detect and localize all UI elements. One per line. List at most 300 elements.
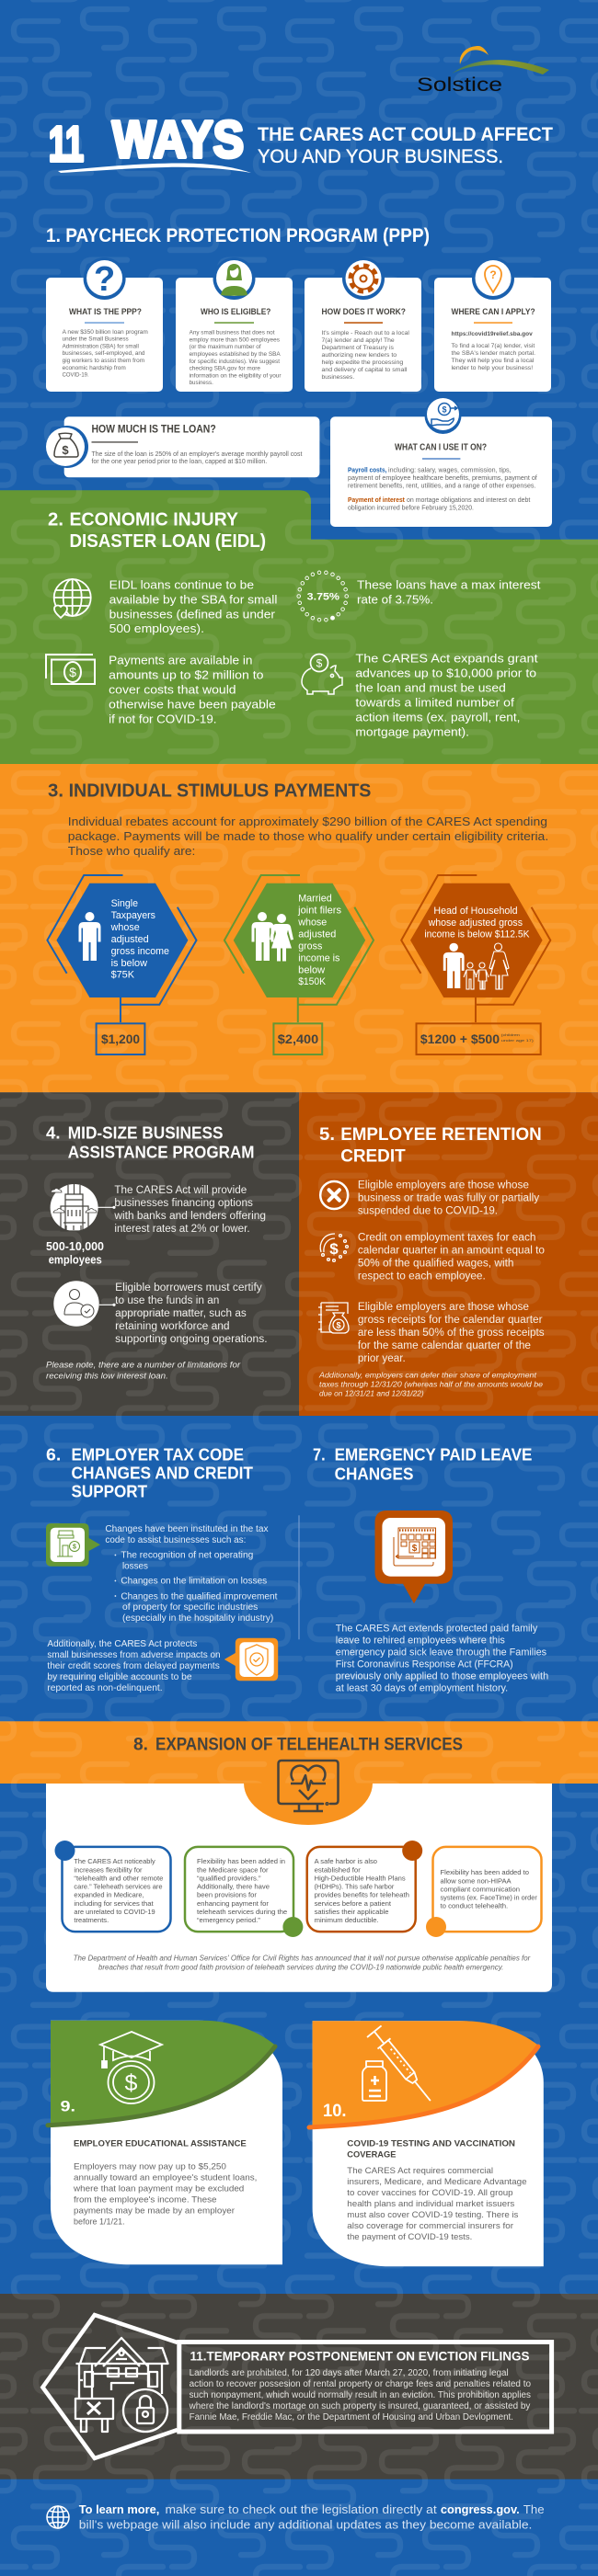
heading: section 2: 2. xyxy=(48,509,63,530)
callout: safe harbor: (HDHPs). This safe harbor xyxy=(315,1883,395,1891)
text: gross receipts: Eligible employers are those whose xyxy=(358,1302,529,1313)
amount box: (children xyxy=(501,1032,520,1037)
heading: section 5: CREDIT xyxy=(340,1146,406,1166)
text: also coverage for commercial insurers for xyxy=(347,2221,513,2231)
text: whose adjusted gross xyxy=(428,918,523,929)
text: grant advances: the loan and must be used xyxy=(355,680,506,694)
text: whose xyxy=(297,917,327,928)
text: grant advances: mortgage payment). xyxy=(355,724,469,738)
text: credit score protection: reported as non-delinquent. xyxy=(47,1683,163,1693)
text: annually toward an employee's student loans, xyxy=(74,2172,257,2183)
title: 11 ways brush lettering xyxy=(49,110,244,172)
text: credit score protection: their credit scores from delayed payments xyxy=(47,1661,220,1671)
text: credit xyxy=(358,1232,545,1282)
callout: Medicare flexibility: Flexibility has been added in xyxy=(197,1857,285,1865)
text: Married xyxy=(298,894,332,905)
text: borrowers certify: retaining workforce and xyxy=(115,1321,230,1332)
note: limitations: Please note, there are a number of limitations for xyxy=(46,1361,241,1371)
card heading: WHO IS ELIGIBLE? xyxy=(201,307,270,316)
callout: safe harbor xyxy=(307,1841,422,1932)
text: insurers, Medicare, and Medicare Advantage xyxy=(347,2177,527,2187)
text: credit score protection xyxy=(47,1639,221,1693)
text xyxy=(348,466,537,511)
title: 11 ways brush lettering: WAYS xyxy=(112,110,244,169)
text: health plans and individual market issuers xyxy=(347,2199,515,2209)
panel: who is eligible xyxy=(176,257,293,392)
text: credit score protection: by requiring eligible accounts to be xyxy=(47,1672,192,1682)
text: Payroll costs, xyxy=(348,466,386,474)
callout: safe harbor: A safe harbor is also xyxy=(315,1857,377,1865)
text: payments xyxy=(109,654,276,726)
heading: section 2 xyxy=(48,509,266,552)
icon: globe with heart xyxy=(54,579,91,618)
icon: dollar bills: $ xyxy=(69,665,76,679)
title xyxy=(49,110,553,173)
text: payments: cover costs that would xyxy=(109,683,236,697)
note: limitations: receiving this low interest loan. xyxy=(46,1372,168,1382)
amount box: $1,200 xyxy=(101,1032,140,1046)
icon: storefront callout: $ xyxy=(73,1544,76,1550)
icon: dollar bills xyxy=(46,655,95,684)
icon: ledger and bag: $ xyxy=(336,1320,341,1329)
callout: CARES flexibility: including for services that xyxy=(74,1899,154,1908)
text: Landlords are prohibited, for 120 days after March 27, 2020, from initiating legal xyxy=(190,2368,509,2378)
heading: section 4: 4. xyxy=(46,1123,61,1142)
heading: section 6: SUPPORT xyxy=(72,1481,148,1500)
text: The CARES Act requires commercial xyxy=(347,2166,493,2176)
heading: section 4: MID-SIZE BUSINESS xyxy=(68,1123,223,1142)
text: obligation incurred before February 15,2020. xyxy=(348,503,474,511)
note: deferral: due on 12/31/21 and 12/31/22) xyxy=(319,1390,424,1398)
text: payments may be made by an employer xyxy=(74,2206,235,2216)
card text: economic hardship from xyxy=(63,365,126,371)
text: tax code changes xyxy=(105,1524,278,1624)
card text: https://covid19relief.sba.gov xyxy=(451,331,533,337)
panel: how does it work xyxy=(305,257,421,392)
text: grant advances: The CARES Act expands grant xyxy=(355,651,538,665)
card text: (or the maximum number of xyxy=(190,344,261,350)
panel: eviction filings xyxy=(42,2315,552,2458)
text: is below xyxy=(111,958,147,969)
text: paid leave: leave to rehired employees where this xyxy=(336,1635,505,1646)
number 9: 9. xyxy=(61,2098,75,2115)
icon: x circle xyxy=(320,1181,348,1209)
icon: calendar callout xyxy=(375,1510,453,1603)
panel: how much is the loan xyxy=(46,416,319,477)
heading: section 4 xyxy=(46,1123,254,1162)
heading: section 8: 8. xyxy=(133,1734,148,1754)
heading: section 2: DISASTER LOAN (EIDL) xyxy=(70,530,266,552)
note: deferral xyxy=(318,1372,544,1398)
icon: money bag: $ xyxy=(62,443,69,457)
text: paid leave: emergency paid sick leave through the Families xyxy=(336,1647,547,1658)
icon: 3.75% dotted ring: 3.75% xyxy=(307,592,339,603)
panel: married joint filers xyxy=(224,875,374,1054)
text xyxy=(110,898,169,981)
label: employees: employees xyxy=(49,1253,102,1266)
text: tax code changes: Changes have been instituted in the tax xyxy=(105,1524,269,1534)
logo: Solstice xyxy=(417,46,549,96)
note: deferral: Additionally, employers can defer their share of employment xyxy=(318,1372,537,1380)
card text: checking SBA.gov for more xyxy=(190,366,260,371)
text: grant advances: towards a limited number of xyxy=(355,695,514,709)
text: EIDL availability: businesses (defined as under xyxy=(109,607,276,621)
heading: WHAT CAN I USE IT ON? xyxy=(395,443,487,453)
text: EIDL availability: EIDL loans continue to be xyxy=(109,577,254,591)
text: Employers may now pay up to $5,250 xyxy=(74,2161,226,2171)
text: max interest: rate of 3.75%. xyxy=(357,592,433,606)
brush underline xyxy=(58,163,251,173)
text: from the employee's income. These xyxy=(74,2194,217,2205)
label: employees xyxy=(46,1240,104,1266)
card text xyxy=(63,329,148,379)
icon: ledger and bag xyxy=(318,1303,349,1333)
icon: piggy bank xyxy=(302,655,342,694)
callout: Medicare flexibility: been provisions for xyxy=(197,1891,258,1899)
text: eligibility: business or trade was fully or partially xyxy=(358,1193,539,1204)
card text: gig workers to assist them from xyxy=(63,358,145,364)
text xyxy=(73,2161,257,2227)
text: grant advances xyxy=(355,651,538,738)
text: such nonpayment, which would normally result in an eviction. This prohibition applies xyxy=(190,2390,531,2400)
text: to cover vaccines for COVID-19. All group xyxy=(347,2188,513,2198)
text: gross receipts xyxy=(358,1302,545,1364)
heading: section 3: 3. xyxy=(48,781,63,802)
callout: CARES flexibility: expanded in Medicare, xyxy=(74,1891,144,1899)
icon: person xyxy=(213,257,256,300)
text: before 1/1/21. xyxy=(74,2217,125,2227)
text: gross income xyxy=(111,946,169,957)
text: Head of Household xyxy=(433,906,518,917)
card text: for specific industries). We suggest xyxy=(190,359,280,365)
callout: safe harbor: provides benefits for teleheath xyxy=(315,1891,409,1899)
icon: couple xyxy=(252,912,293,962)
panel: covid-19 testing xyxy=(309,2021,544,2266)
card text xyxy=(322,330,409,381)
text: where the landlord's mortage on such property is insured, guaranteed, or assisted by xyxy=(189,2401,530,2411)
heading: section 5: 5. xyxy=(319,1124,335,1145)
amount box: $2,400 xyxy=(278,1032,318,1046)
icon: hand with coin xyxy=(425,397,462,434)
text: borrowers certify: Eligible borrowers must certify xyxy=(115,1282,262,1294)
text: borrowers certify: appropriate matter, such as xyxy=(115,1308,247,1319)
logo: Solstice: Solstice xyxy=(417,74,502,96)
icon: certified person xyxy=(53,1281,116,1327)
callout: safe harbor: established for xyxy=(315,1865,361,1874)
card text: the SBA's lender match portal. xyxy=(451,350,535,357)
text: tax code changes: Changes to the qualified improvement xyxy=(121,1591,278,1601)
callout: non-HIPAA: Flexibility has been added to xyxy=(440,1868,529,1876)
text: the payment of COVID-19 tests. xyxy=(347,2232,472,2242)
heading: section 6: EMPLOYER TAX CODE xyxy=(72,1444,244,1464)
number 10: 10. xyxy=(323,2102,346,2121)
icon: dollar dots: $ xyxy=(329,1240,339,1258)
card text: Administration (SBA) for small xyxy=(63,344,139,349)
callout: safe harbor: services before a patient xyxy=(315,1899,391,1908)
text: credit: Credit on employment taxes for each xyxy=(358,1232,535,1243)
heading: section 7: EMERGENCY PAID LEAVE xyxy=(335,1444,532,1464)
text: eligibility: suspended due to COVID-19. xyxy=(358,1206,498,1217)
panel: single taxpayers xyxy=(47,875,197,1054)
card text: business. xyxy=(190,380,213,386)
callout: CARES flexibility: The CARES Act noticeably xyxy=(74,1857,155,1865)
callout: CARES flexibility: “telehealth and other remote xyxy=(74,1874,163,1882)
amount box: under age 17) xyxy=(501,1038,535,1043)
icon: calendar callout: $ xyxy=(412,1544,418,1554)
text: must also cover COVID-19 testing. There is xyxy=(347,2210,519,2220)
subtitle xyxy=(258,124,553,167)
card heading: HOW DOES IT WORK? xyxy=(322,307,406,316)
card text: help expedite the processing xyxy=(322,359,404,366)
icon: house with lock xyxy=(75,2338,167,2432)
card text: employees established by the SBA xyxy=(190,351,281,358)
text xyxy=(424,906,530,940)
icon: gear xyxy=(342,257,385,300)
text: borrowers certify xyxy=(115,1282,268,1345)
icon: map pin: ? xyxy=(489,268,497,281)
text: gross receipts: are less than 50% of the gross receipts xyxy=(358,1328,545,1339)
card text: authorizing new lenders to xyxy=(322,352,397,359)
card heading: WHAT IS THE PPP? xyxy=(69,307,142,316)
card text: To find a local 7(a) lender, visit xyxy=(451,343,535,349)
card text: lender to help your business! xyxy=(451,365,533,371)
callout: Medicare flexibility xyxy=(185,1847,303,1937)
text: including: salary, wages, commission, tips, xyxy=(388,466,512,474)
text xyxy=(347,2166,527,2242)
heading: section 5 xyxy=(319,1124,542,1166)
footer text: The xyxy=(523,2503,545,2516)
callout: Medicare flexibility: “qualified providers.” xyxy=(197,1874,261,1882)
text: credit: 50% of the qualified wages, with xyxy=(358,1258,513,1269)
callout: non-HIPAA: systems (ex. FaceTime) in order xyxy=(440,1894,537,1902)
text: borrowers certify: to use the funds in an xyxy=(115,1295,219,1306)
callout: safe harbor: satisfies their applicable xyxy=(315,1908,388,1916)
text: joint filers xyxy=(297,906,341,917)
icon: piggy bank: $ xyxy=(316,656,323,669)
callout: non-HIPAA: compliant communication xyxy=(440,1886,520,1894)
text: tax code changes: Changes on the limitation on losses xyxy=(121,1577,267,1587)
text: section 3 intro: Those who qualify are: xyxy=(68,844,195,858)
text xyxy=(189,2368,531,2422)
icon: grad cap and coin: $ xyxy=(125,2070,138,2096)
amount box xyxy=(273,1023,322,1054)
text: EIDL availability: 500 employees). xyxy=(109,621,204,635)
text: payments: if not for COVID-19. xyxy=(109,712,217,726)
heading: section 7 xyxy=(313,1444,532,1483)
text: Single xyxy=(111,898,138,909)
callout: Medicare flexibility: Additionally, there have xyxy=(197,1883,270,1891)
icon: office building xyxy=(51,1184,116,1231)
heading: section 7: CHANGES xyxy=(335,1464,413,1483)
icon: grad cap and coin xyxy=(100,2032,162,2103)
text: payments: Payments are available in xyxy=(109,654,252,667)
card text: 7(a) lender and apply! The xyxy=(322,337,395,344)
text: tax code changes: losses xyxy=(122,1561,148,1571)
icon: hand with coin: $ xyxy=(442,405,447,414)
text: paid leave: The CARES Act extends protected paid family xyxy=(336,1623,538,1634)
heading: section 4: ASSISTANCE PROGRAM xyxy=(68,1143,254,1162)
callout: Medicare flexibility: the Medicare space for xyxy=(197,1865,269,1874)
text: section 3 intro: package. Payments will be made to those who qualify under certain eligibility criteria. xyxy=(68,829,548,843)
heading: section 8: EXPANSION OF TELEHEALTH SERVICES xyxy=(155,1734,463,1754)
text: gross receipts: gross receipts for the calendar quarter xyxy=(358,1315,543,1326)
text: tax code changes: code to assist businesses such as: xyxy=(105,1535,246,1545)
text: borrowers certify: supporting ongoing operations. xyxy=(115,1334,268,1345)
text: The size of the loan is 250% of an employer's average monthly payroll cost xyxy=(92,450,302,458)
text: $75K xyxy=(111,970,135,981)
amount box xyxy=(97,1023,144,1054)
note: HHS enforcement: breaches that result from good faith provision of teleheath services during the COVID-19 nationwide public health emergency. xyxy=(98,1964,503,1972)
text: section 3 intro: Individual rebates account for approximately $290 billion of the CARES Act spending xyxy=(68,815,547,828)
card text: businesses. xyxy=(322,374,354,381)
card text: A new $350 billion loan program xyxy=(63,329,148,336)
card text: employ more than 500 employees xyxy=(190,336,281,344)
text: payments: otherwise have been payable xyxy=(109,698,276,712)
text: payment of employee healthcare benefits, premiums, payment of xyxy=(348,473,537,482)
icon: footer globe xyxy=(47,2506,69,2528)
panel: what is the PPP xyxy=(46,257,163,392)
text: financing options xyxy=(113,1185,266,1235)
text: tax code changes: The recognition of net operating xyxy=(121,1550,253,1560)
text: eligibility: Eligible employers are those whose xyxy=(358,1180,529,1191)
text: income is xyxy=(298,952,340,963)
text: financing options: with banks and lenders offering xyxy=(113,1211,266,1222)
callout: Medicare flexibility: teleheath services during the xyxy=(197,1908,287,1916)
icon: question mark xyxy=(84,257,126,300)
amount box: $1200 + $500 xyxy=(420,1032,500,1046)
amount box xyxy=(416,1023,541,1054)
card text: COVID-19. xyxy=(63,371,89,379)
text: paid leave: at least 30 days of employment history. xyxy=(336,1682,508,1693)
text: EIDL availability: available by the SBA for small xyxy=(109,592,278,606)
heading: EMPLOYER EDUCATIONAL ASSISTANCE xyxy=(74,2138,247,2149)
callout: CARES flexibility xyxy=(55,1841,171,1932)
heading: section 7: 7. xyxy=(313,1444,326,1464)
text: Fannie Mae, Freddie Mac, or the Department of Housing and Urban Devlopment. xyxy=(190,2412,513,2422)
note: HHS enforcement: The Department of Health and Human Services' Office for Civil Rights has announced that it will not pursue otherwise applicable penalties for xyxy=(74,1955,531,1963)
text: adjusted xyxy=(298,929,336,940)
text: max interest xyxy=(357,577,541,606)
text: financing options: The CARES Act will provide xyxy=(114,1185,247,1196)
title: 11 ways brush lettering: 11 xyxy=(49,117,84,172)
heading: section 6 xyxy=(46,1444,254,1500)
text: gross xyxy=(298,940,323,952)
icon: shield callout xyxy=(224,1638,278,1681)
panel: where can I apply xyxy=(434,257,551,392)
callout: Medicare flexibility: enhancing payment for xyxy=(197,1899,270,1908)
footer text: bill's webpage will also include any additional updates as they become available. xyxy=(79,2518,532,2531)
footer text xyxy=(79,2503,545,2531)
callout: Medicare flexibility: “emergency period.” xyxy=(197,1916,260,1924)
text: credit score protection: Additionally, the CARES Act protects xyxy=(47,1639,197,1649)
card text xyxy=(451,331,535,371)
panel: telehealth xyxy=(46,1761,552,1992)
note: deferral: taxes through 12/31/20 (whereas half of the amounts would be xyxy=(319,1381,544,1389)
icon: 3.75% dotted ring xyxy=(297,571,349,621)
text: income is below $112.5K xyxy=(424,929,530,940)
text: max interest: These loans have a max interest xyxy=(357,577,541,591)
text: action to recover possesion of rental property or charge fees and penalties related to xyxy=(190,2379,531,2389)
text: gross receipts: for the same calendar quarter of the xyxy=(358,1340,531,1351)
text: below xyxy=(298,964,325,975)
text: financing options: businesses financing options xyxy=(114,1198,253,1209)
callout: non-HIPAA: to conduct telehealth. xyxy=(440,1902,508,1910)
heading: section 2: ECONOMIC INJURY xyxy=(70,509,238,530)
card heading: WHERE CAN I APPLY? xyxy=(451,307,535,316)
label: employees: 500-10,000 xyxy=(46,1240,104,1253)
text: $150K xyxy=(298,976,327,987)
text: on mortage obligations and interest on debt xyxy=(407,496,530,504)
callout: safe harbor: minimum deductible. xyxy=(315,1916,379,1924)
heading: HOW MUCH IS THE LOAN? xyxy=(92,422,216,435)
text: Taxpayers xyxy=(111,910,155,921)
icon: money bag xyxy=(46,426,88,468)
icon: question mark: ? xyxy=(94,260,115,299)
card text xyxy=(190,329,282,386)
panel: employer educational assistance xyxy=(48,2021,282,2264)
card text: They will help you find a local xyxy=(451,358,535,364)
heading: section 3: INDIVIDUAL STIMULUS PAYMENTS xyxy=(69,781,371,802)
text: tax code changes: (especially in the hospitality industry) xyxy=(122,1613,273,1624)
icon: person xyxy=(79,912,101,961)
heading: section 1: 1. PAYCHECK PROTECTION PROGRAM (PPP) xyxy=(46,225,430,246)
text: credit: respect to each employee. xyxy=(358,1271,486,1282)
callout: safe harbor: High-Deductible Health Plans xyxy=(315,1874,406,1882)
text: where that loan payment may be excluded xyxy=(73,2183,244,2194)
text xyxy=(92,450,302,465)
icon: syringe and vial xyxy=(362,2025,438,2106)
icon: storefront callout xyxy=(46,1523,100,1567)
callout: CARES flexibility: increases flexibility for xyxy=(74,1865,143,1874)
footer text: congress.gov. xyxy=(441,2503,520,2516)
text: credit: calendar quarter in an amount equal to xyxy=(358,1245,545,1256)
text xyxy=(297,894,341,987)
text: financing options: interest rates at 2% or lower. xyxy=(114,1224,250,1235)
note: limitations xyxy=(46,1361,241,1382)
text: adjusted xyxy=(111,934,149,945)
icon: heart monitor xyxy=(278,1761,339,1811)
card text: Department of Treasury is xyxy=(322,345,395,351)
text: for the one year period prior to the loan, capped at $10 million. xyxy=(92,457,267,465)
text: paid leave xyxy=(336,1623,548,1693)
card text: businesses, self-employed, and xyxy=(63,350,145,357)
callout: CARES flexibility: care.” Teleheath services are xyxy=(74,1883,163,1891)
text: tax code changes: of property for specific industries xyxy=(122,1602,258,1613)
icon: map pin xyxy=(472,257,514,300)
text: payments: amounts up to $2 million to xyxy=(109,668,263,682)
text: gross receipts: prior year. xyxy=(358,1353,406,1364)
icon: dollar dots xyxy=(320,1234,348,1261)
heading: 11.TEMPORARY POSTPONEMENT ON EVICTION FILINGS xyxy=(190,2348,530,2363)
footer text: make sure to check out the legislation directly at xyxy=(166,2503,437,2516)
callout: CARES flexibility: are unrelated to COVID-19 xyxy=(74,1908,155,1916)
heading: section 5: EMPLOYEE RETENTION xyxy=(340,1124,542,1145)
text: retirement benefits, rent, utilities, and a range of other expenses. xyxy=(348,481,535,489)
subtitle: YOU AND YOUR BUSINESS. xyxy=(258,146,503,167)
text: whose xyxy=(110,922,140,933)
text: eligibility xyxy=(358,1180,539,1217)
subtitle: THE CARES ACT COULD AFFECT xyxy=(258,124,553,145)
card text: and delivery of capital to small xyxy=(322,367,408,373)
text: section 3 intro xyxy=(68,815,548,858)
footer text: To learn more, xyxy=(79,2503,159,2516)
text: EIDL availability xyxy=(109,577,278,635)
text: credit score protection: small businesses from adverse impacts on xyxy=(47,1650,221,1660)
icon: family xyxy=(443,943,509,989)
heading: section 6: 6. xyxy=(46,1444,61,1464)
callout: non-HIPAA xyxy=(426,1847,541,1937)
text: Payment of interest xyxy=(348,496,405,504)
